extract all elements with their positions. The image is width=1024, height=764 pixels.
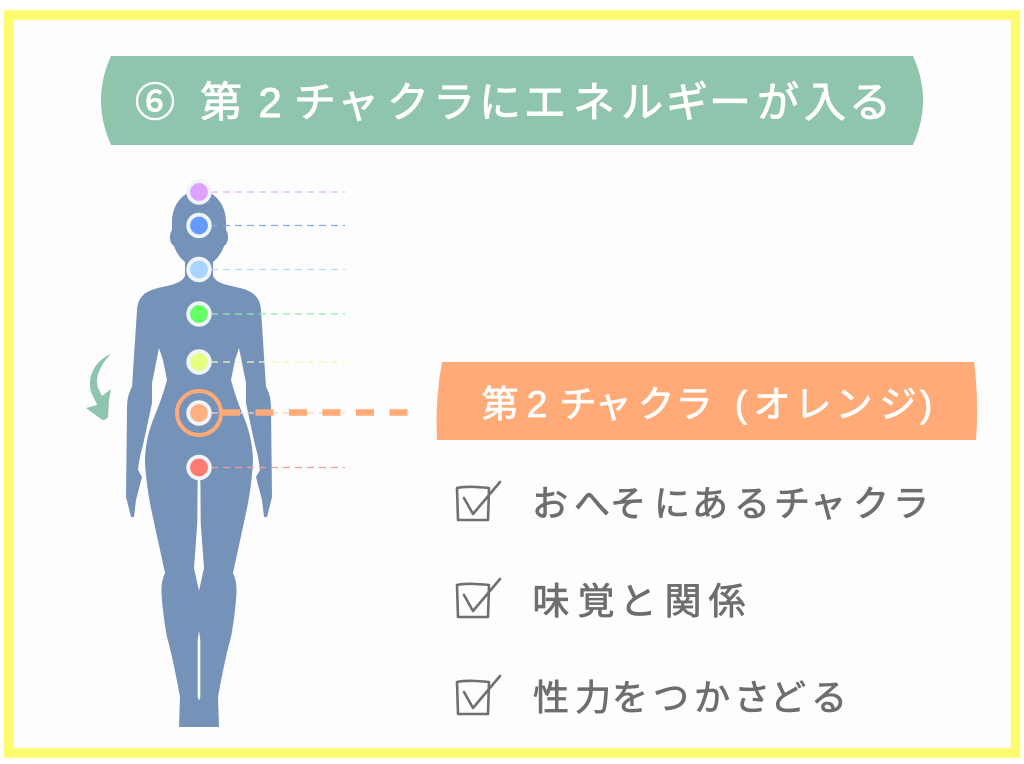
body silhouette — [126, 190, 272, 727]
title text: 第2チャクラにエネルギーが入る — [200, 79, 891, 126]
item text: おへそにあるチャクラ — [532, 483, 929, 524]
list item 3 — [457, 676, 847, 718]
title number: ⑥ — [135, 81, 175, 125]
heading text: 第2チャクラ(オレンジ) — [482, 384, 932, 425]
icon: checkbox — [457, 579, 500, 617]
chakra guide lines — [211, 192, 345, 468]
title banner — [101, 56, 923, 145]
list item 1 — [457, 482, 929, 524]
orange heading banner — [437, 362, 977, 440]
icon: checkbox — [457, 482, 500, 520]
icon: checkbox — [457, 676, 500, 714]
thick dashed connector — [222, 409, 410, 416]
list item 2 — [457, 579, 746, 622]
icon: downward curved arrow — [86, 354, 111, 420]
item text: 味覚と関係 — [532, 581, 746, 622]
chakra points — [188, 181, 210, 478]
highlight ring on second chakra — [177, 391, 221, 435]
item text: 性力をつかさどる — [533, 677, 847, 718]
